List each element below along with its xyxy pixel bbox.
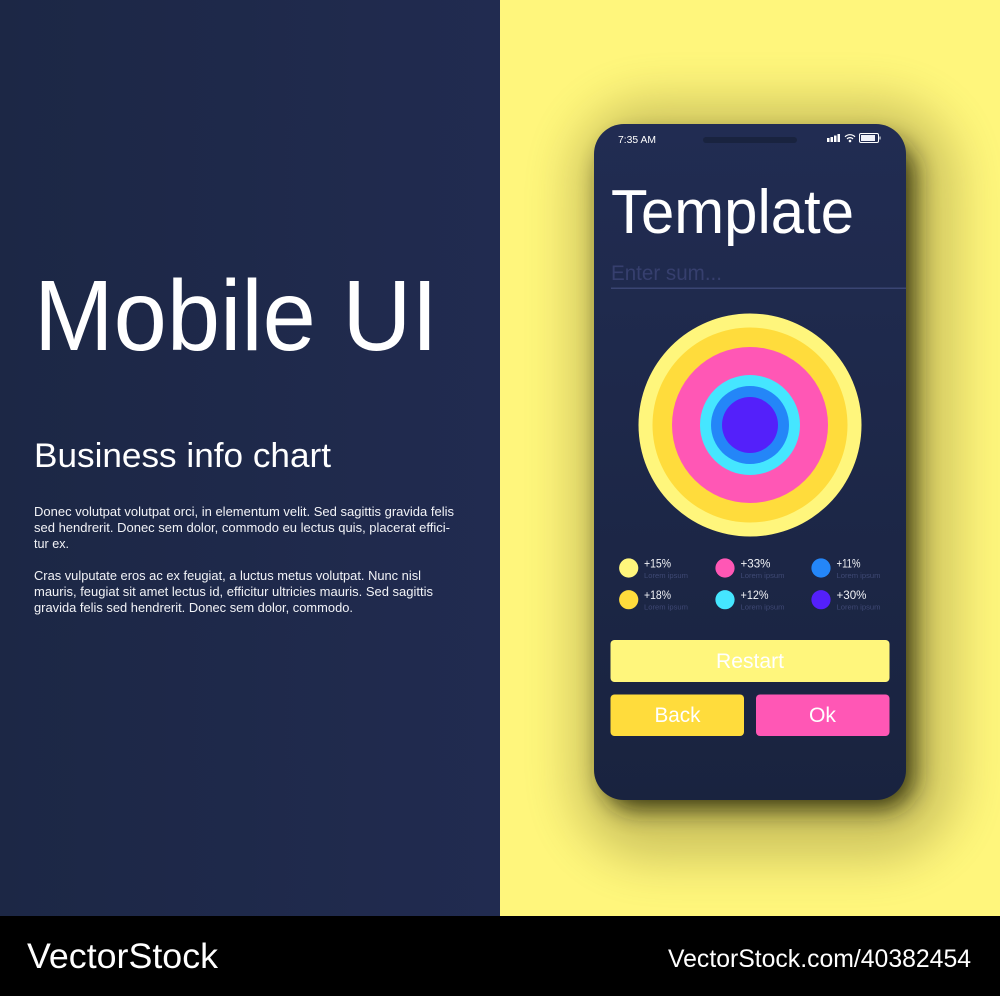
button: Back: Back xyxy=(654,704,701,727)
legend item: +30%: +30% xyxy=(836,588,867,602)
input underline xyxy=(611,288,906,289)
chart: concentric circles xyxy=(638,314,862,536)
button: Restart xyxy=(610,640,890,682)
legend item: +12%: Lorem ipsum xyxy=(740,602,784,612)
input placeholder: Enter sum: Enter sum... xyxy=(611,262,722,285)
legend item: +11% xyxy=(811,556,880,580)
legend item: +15%: Lorem ipsum xyxy=(644,571,688,580)
heading: Mobile UI: Mobile UI xyxy=(34,260,438,372)
text block: description: mauris, feugiat sit amet lectus id, efficitur ultricies mauris. Sed sagittis xyxy=(34,585,433,599)
button: Back xyxy=(610,694,744,736)
legend item: +15% xyxy=(619,556,688,580)
text block: description: Cras vulputate eros ac ex feugiat, a luctus metus volutpat. Nunc nisl xyxy=(34,569,421,583)
legend item: +12% xyxy=(715,588,784,612)
legend item: +33%: +33% xyxy=(740,556,771,570)
subheading: Business info chart: Business info chart xyxy=(34,437,332,475)
legend item: +18%: +18% xyxy=(644,588,671,602)
legend item: +11%: +11% xyxy=(836,556,861,570)
legend item: +33%: Lorem ipsum xyxy=(740,571,784,580)
icon: signal bars xyxy=(827,134,840,142)
legend item: +30% xyxy=(811,588,880,612)
button: Ok: Ok xyxy=(809,704,836,727)
legend item: +12%: +12% xyxy=(740,588,769,602)
footer url: VectorStock.com/40382454 xyxy=(668,945,971,973)
text block: description: sed hendrerit. Donec sem dolor, commodo eu lectus quis, placerat effici- xyxy=(34,521,450,535)
button: Ok xyxy=(756,694,890,736)
status bar time: 7:35 AM xyxy=(618,135,656,146)
panel: phone mockup xyxy=(594,124,906,800)
legend item: +18%: Lorem ipsum xyxy=(644,602,688,612)
text block: description xyxy=(34,505,454,615)
panel: right yellow background xyxy=(500,0,1000,916)
legend item: +18% xyxy=(619,588,688,612)
icon: battery xyxy=(860,134,880,142)
footer bar xyxy=(0,916,1000,996)
text block: description: tur ex. xyxy=(34,537,69,551)
footer logo: VectorStock: VectorStock xyxy=(27,937,219,976)
panel: left navy background xyxy=(0,0,500,916)
heading: Template: Template xyxy=(611,178,854,247)
text block: description: gravida felis sed hendrerit. Donec sem dolor, commodo. xyxy=(34,601,353,615)
legend item: +15%: +15% xyxy=(644,556,671,570)
legend item: +11%: Lorem ipsum xyxy=(836,571,880,580)
phone drop shadow xyxy=(572,100,957,860)
icon: wifi xyxy=(845,135,855,142)
legend item: +33% xyxy=(715,556,784,580)
button: Restart: Restart xyxy=(716,650,784,673)
legend item: +30%: Lorem ipsum xyxy=(836,602,880,612)
phone speaker notch xyxy=(703,137,797,143)
text block: description: Donec volutpat volutpat orci, in elementum velit. Sed sagittis gravida felis xyxy=(34,505,454,519)
legend xyxy=(619,556,880,612)
